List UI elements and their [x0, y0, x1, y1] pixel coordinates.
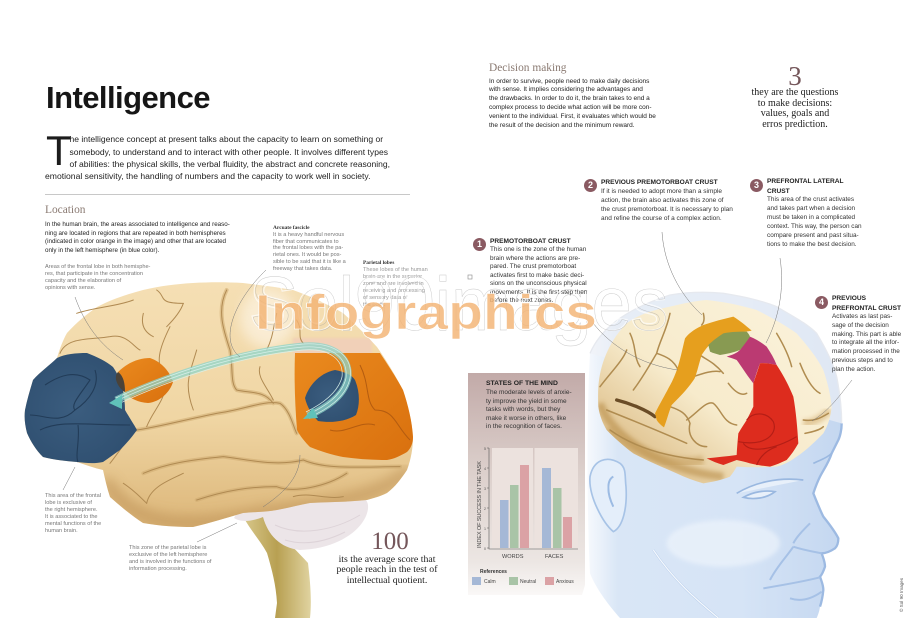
stat: 3: [752, 61, 838, 130]
note: right hemisphere zone: mental functions of the: [45, 521, 101, 527]
brain zone: premotor orange: [655, 317, 752, 427]
bar chart: index of success: 4: [484, 467, 486, 471]
callout 1: premotorboat crust: movements. It is the first step then: [490, 288, 587, 296]
decision making text: complex process to decide what action will be more con-: [489, 104, 652, 111]
note: arcuate fascicle: rietal ones. It would be pos-: [273, 252, 341, 258]
heading: location: Location: [45, 204, 86, 216]
note: arcuate fascicle: Arcuate fascicle: [273, 225, 310, 231]
callout 3: prefrontal lateral crust: 3: [754, 180, 759, 190]
bar chart: index of success: 5: [484, 447, 486, 451]
bar chart: index of success: FACES: [545, 554, 564, 560]
callout 3: prefrontal lateral crust: must be taken in a complicated: [767, 214, 855, 221]
callout 4: previous prefrontal crust: mation processed in the: [832, 348, 900, 355]
note: left hemisphere zone: exclusive of the left hemisphere: [129, 552, 207, 558]
left brain: [25, 282, 413, 527]
panel text: states of the mind: STATES OF THE MIND: [486, 380, 558, 387]
panel text: states of the mind: [486, 380, 572, 430]
note: parietal lobes: zone and are involved in: [363, 281, 424, 287]
panel text: states of the mind: ty improve the yield in some: [486, 398, 567, 405]
note: parietal lobes: of sensory data of: [363, 295, 407, 301]
bar chart: index of success: Neutral: [520, 579, 536, 585]
decision making text: In order to survive, people need to make daily decisions: [489, 78, 649, 84]
illustration layer: brains and head: [24, 194, 852, 618]
bar chart: index of success: References: [480, 569, 507, 575]
callout 2: previous premotorboat crust: 2: [588, 180, 593, 190]
stat: 100: people reach in the test of: [337, 564, 437, 575]
location text: only in the left hemisphere (in blue color).: [45, 247, 159, 254]
callout 4: previous prefrontal crust: making. This part is able: [832, 331, 901, 338]
leader lines: [63, 232, 852, 542]
eye: [737, 453, 832, 499]
callout 2: previous premotorboat crust: PREVIOUS PREMOTORBOAT CRUST: [601, 179, 718, 186]
bar chart: index of success: 3: [484, 487, 486, 491]
stat: 3: to make decisions:: [758, 98, 832, 108]
note: parietal lobes: These lobes of the human: [363, 267, 428, 273]
callout 1: premotorboat crust: pared. The crust premotorboat: [490, 263, 576, 270]
note: left hemisphere zone: and is involved in the functions of: [129, 559, 211, 565]
note: arcuate fascicle: freeway that takes data.: [273, 266, 332, 272]
intro text: of abilities: the physical skills, the verbal fluidity, the abstract and concrete reasoning,: [70, 159, 390, 169]
location text: ning are located in regions that are repeated in both hemispheres: [45, 230, 226, 237]
callout 3: prefrontal lateral crust: This area of the crust activates: [767, 196, 854, 203]
intro text: somebody, to understand and to interact with other people. It involves different types: [70, 147, 388, 157]
callout 1: premotorboat crust: This one is the zone of the human: [490, 246, 586, 253]
bar chart: index of success: INDEX OF SUCCESS IN THE TASK: [477, 461, 483, 548]
heading: decision making: Decision making: [489, 62, 567, 74]
note: frontal lobe areas: res, that participate in the concentration: [45, 271, 143, 277]
callout 2: previous premotorboat crust: action, the brain also activates this zone of: [601, 197, 724, 204]
callout 1: premotorboat crust: 1: [477, 239, 482, 249]
location text: In the human brain, the areas associated to intelligence and reaso-: [45, 221, 230, 228]
head: [587, 292, 842, 618]
stat: 100: [336, 528, 438, 586]
note: right hemisphere zone: It is associated to the: [45, 514, 98, 520]
callout 3: prefrontal lateral crust: tions to make the best decision.: [767, 241, 857, 248]
callout 1: premotorboat crust: brain where the actions are pre-: [490, 254, 580, 262]
stat: 100: 100: [371, 528, 409, 555]
decision making text: [489, 78, 656, 129]
ear: [590, 459, 626, 532]
brainstem: [243, 515, 311, 618]
location text: (indicated in color orange in the image) and other that are located: [45, 238, 226, 245]
callout 1: premotorboat crust: PREMOTORBOAT CRUST: [490, 238, 571, 245]
note: frontal lobe areas: Areas of the frontal lobe in both hemisphe-: [45, 264, 150, 270]
note: frontal lobe areas: [45, 264, 150, 291]
note: parietal lobes: brain are in the superior: [363, 274, 422, 280]
callout 3: prefrontal lateral crust: compare present and past situa-: [767, 232, 859, 239]
callout 1: premotorboat crust: [473, 238, 587, 304]
note: left hemisphere zone: information processing.: [129, 566, 187, 572]
callout 4: previous prefrontal crust: to integrate all the infor-: [832, 339, 899, 346]
note: parietal lobes: the body.: [363, 302, 386, 308]
small square marker: [468, 275, 472, 279]
bar chart: index of success: Anxious: [556, 579, 574, 585]
note: arcuate fascicle: [273, 225, 346, 272]
left brain small orange area: [118, 358, 173, 403]
bar chart: index of success: [472, 447, 578, 585]
callout 3: prefrontal lateral crust: context. This way, the person can: [767, 223, 862, 230]
callout 1: premotorboat crust: sions on the unconscious physical: [490, 280, 587, 287]
note: frontal lobe areas: opinions with sense.: [45, 285, 95, 291]
callout 4: previous prefrontal crust: plan the action.: [832, 366, 875, 373]
brain zone: prefrontal green: [708, 332, 750, 355]
stat: 100: intellectual quotient.: [347, 574, 427, 586]
note: arcuate fascicle: It is a heavy handful nervous: [273, 232, 344, 238]
title: Intelligence: [46, 80, 210, 115]
intro text: T: [46, 127, 72, 174]
bar chart: index of success: 1: [484, 527, 486, 531]
right brain: [598, 300, 832, 483]
note: right hemisphere zone: the right hemisphere.: [45, 507, 98, 513]
callout 4: previous prefrontal crust: PREVIOUS: [832, 295, 866, 302]
stat: 3: values, goals and: [761, 108, 829, 119]
decision making text: venient to the individual. First, it evaluates which would be: [489, 113, 656, 120]
note: right hemisphere zone: human brain.: [45, 528, 78, 534]
callout 3: prefrontal lateral crust: PREFRONTAL LATERAL: [767, 178, 844, 185]
callout 1: premotorboat crust: activates first to make basic deci-: [490, 272, 584, 278]
callout 4: previous prefrontal crust: [815, 295, 901, 373]
panel text: states of the mind: The moderate levels of anxie-: [486, 389, 572, 396]
face creases: [653, 523, 822, 618]
bar chart: index of success: 2: [484, 507, 486, 511]
note: arcuate fascicle: the frontal lobes with the pa-: [273, 245, 343, 251]
decision making text: the drawbacks. In order to do it, the brain takes to end a: [489, 95, 650, 102]
callout 4: previous prefrontal crust: PREFRONTAL CRUST: [832, 304, 901, 312]
note: arcuate fascicle: fiber that communicates to: [273, 239, 339, 245]
left brain large orange area: [295, 353, 413, 460]
stat: 3: they are the questions: [752, 87, 838, 98]
callout 4: previous prefrontal crust: previous steps and to: [832, 357, 893, 364]
note: parietal lobes: receiving and processing: [363, 288, 425, 294]
callout 4: previous prefrontal crust: sage of the decision: [832, 322, 889, 329]
note: right hemisphere zone: [45, 493, 101, 534]
callout 4: previous prefrontal crust: Activates as last pas-: [832, 313, 892, 320]
intro text: he intelligence concept at present talks about the capacity to learn on something or: [70, 134, 383, 144]
callout 3: prefrontal lateral crust: [750, 178, 862, 248]
bar chart: index of success: Calm: [484, 579, 496, 585]
credit: © Sol 90 Images: [899, 578, 904, 612]
note: right hemisphere zone: This area of the frontal: [45, 493, 101, 499]
intro text: [45, 127, 390, 180]
stat: 3: 3: [788, 61, 802, 91]
callout 2: previous premotorboat crust: [584, 179, 733, 222]
panel text: states of the mind: make it worse in others, like: [486, 415, 566, 422]
callout 4: previous prefrontal crust: 4: [819, 297, 824, 307]
brain zone: lateral magenta: [727, 337, 777, 383]
callout 3: prefrontal lateral crust: and takes part when a decision: [767, 205, 855, 212]
sulci: [60, 290, 400, 503]
location text: [45, 221, 230, 254]
note: frontal lobe areas: capacity and the elaboration of: [45, 278, 121, 284]
panel text: states of the mind: tasks with words, but they: [486, 406, 560, 413]
note: left hemisphere zone: This zone of the parietal lobe is: [129, 545, 206, 551]
left brain blue frontal area: [25, 353, 137, 463]
panel: states of the mind background: [468, 373, 585, 595]
callout 2: previous premotorboat crust: and refine the course of a complex action.: [601, 215, 722, 222]
bar chart: index of success: WORDS: [502, 554, 524, 560]
intro text: emotional sensitivity, the handling of numbers and the capacity to work well in society.: [45, 170, 370, 180]
note: parietal lobes: Parietal lobes: [363, 260, 394, 266]
note: arcuate fascicle: sible to be said that it is like a: [273, 259, 346, 265]
callout 3: prefrontal lateral crust: CRUST: [767, 188, 790, 194]
arrows: association fascicle: [109, 344, 350, 419]
watermark: Infographics: [255, 286, 597, 340]
callout 1: premotorboat crust: before the next zones.: [490, 297, 553, 304]
panel text: states of the mind: in the recognition of faces.: [486, 423, 562, 430]
bar chart: index of success: 0: [484, 547, 486, 551]
decision making text: the result of the decision and the minimum reward.: [489, 122, 635, 129]
note: parietal lobes: [363, 260, 428, 308]
callout 2: previous premotorboat crust: the crust premotorboat. It is necessary to plan: [601, 206, 733, 213]
note: right hemisphere zone: lobe is exclusive of: [45, 500, 92, 506]
divider: [45, 194, 410, 196]
decision making text: with sense. It implies considering the advantages and: [489, 86, 643, 93]
brain zone: prefrontal red: [707, 363, 798, 467]
stat: 100: its the average score that: [339, 554, 435, 564]
cerebellum: [234, 499, 368, 550]
note: left hemisphere zone: [129, 545, 212, 572]
callout 2: previous premotorboat crust: If it is needed to adopt more than a simple: [601, 188, 722, 195]
stat: 3: erros prediction.: [762, 118, 828, 130]
